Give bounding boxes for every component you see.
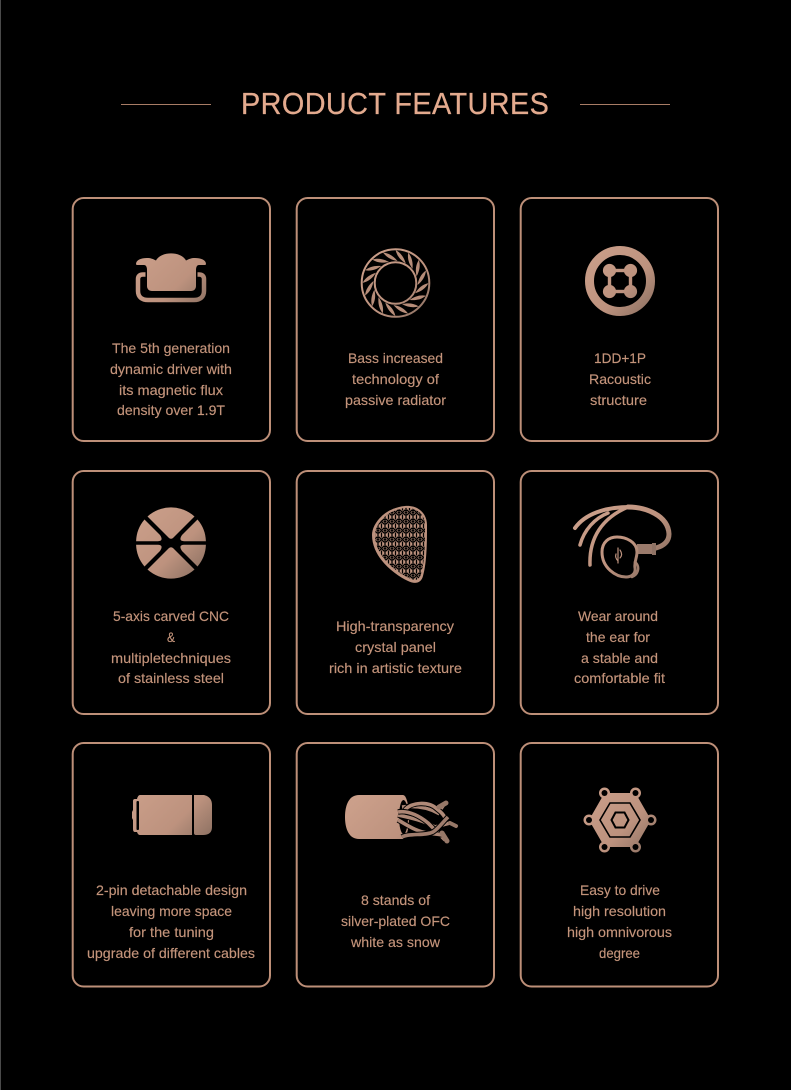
- text: OFC cable: [341, 892, 450, 950]
- panel: 2-pin connector: [73, 743, 270, 986]
- text: acoustic structure: [589, 350, 651, 408]
- text: driver: density over 1.9T: [117, 402, 225, 418]
- text: crystal panel: rich in artistic texture: [329, 660, 462, 676]
- icon: braided cable: [345, 795, 456, 841]
- text: CNC carving: &: [167, 629, 176, 645]
- text: crystal panel: High-transparency: [336, 618, 454, 634]
- panel: dynamic driver: [73, 198, 270, 441]
- text: over-ear fit: a stable and: [581, 650, 658, 666]
- panel: CNC carving: [73, 471, 270, 714]
- text: over-ear fit: the ear for: [586, 629, 650, 645]
- panel: acoustic structure: [521, 198, 718, 441]
- text: 2-pin connector: 2-pin detachable design: [96, 882, 247, 898]
- text: CNC carving: 5-axis carved CNC: [113, 608, 229, 624]
- text: easy to drive: Easy to drive: [580, 882, 660, 898]
- text: driver: dynamic driver with: [110, 361, 232, 377]
- text: radiator: [345, 350, 446, 408]
- title rule left: [121, 104, 211, 105]
- icon: radiator: [362, 249, 429, 317]
- text: crystal panel: [329, 618, 462, 676]
- text: easy to drive: high resolution: [573, 903, 666, 919]
- panel: passive radiator: [297, 198, 494, 441]
- text: OFC cable: white as snow: [350, 934, 441, 950]
- panel: easy to drive: [521, 743, 718, 986]
- text: over-ear fit: [574, 608, 665, 686]
- text: 2-pin connector: leaving more space: [111, 903, 232, 919]
- icon: carved disc: [136, 507, 206, 579]
- icon: earphone with cable: [575, 507, 669, 577]
- text: easy to drive: degree: [599, 945, 640, 961]
- text: acoustic structure: structure: [590, 392, 647, 408]
- text: acoustic structure: 1DD+1P: [594, 350, 646, 366]
- text: radiator: technology of: [352, 371, 439, 387]
- text: over-ear fit: comfortable fit: [574, 670, 665, 686]
- text: radiator: Bass increased: [348, 350, 443, 366]
- panel: crystal panel: [297, 471, 494, 714]
- panel: OFC cable: [297, 743, 494, 986]
- icon: patterned faceplate: [372, 506, 427, 583]
- text: CNC carving: of stainless steel: [118, 670, 224, 686]
- panel: over-ear fit: [521, 471, 718, 714]
- text: 2-pin connector: [87, 882, 255, 961]
- text: driver: [110, 340, 232, 418]
- text: crystal panel: crystal panel: [355, 639, 436, 655]
- text: OFC cable: silver-plated OFC: [341, 913, 450, 929]
- text: radiator: passive radiator: [345, 392, 446, 408]
- text: OFC cable: 8 stands of: [361, 892, 430, 908]
- icon: 2-pin plug: [132, 795, 212, 835]
- text: over-ear fit: Wear around: [578, 608, 658, 624]
- text: CNC carving: multipletechniques: [111, 650, 231, 666]
- icon: driver: [136, 253, 206, 300]
- text: driver: its magnetic flux: [119, 382, 223, 398]
- text: acoustic structure: Racoustic: [589, 371, 651, 387]
- text: easy to drive: high omnivorous: [567, 924, 672, 940]
- icon: hex nut: [584, 788, 656, 852]
- text: 2-pin connector: for the tuning: [129, 924, 214, 940]
- text: CNC carving: [111, 608, 231, 686]
- text: driver: The 5th generation: [112, 340, 230, 356]
- text: easy to drive: [567, 882, 672, 961]
- icon: ring with four nodes: [590, 250, 650, 312]
- title text: PRODUCT FEATURES: [241, 87, 549, 121]
- text: 2-pin connector: upgrade of different cables: [87, 945, 255, 961]
- title rule right: [580, 104, 670, 105]
